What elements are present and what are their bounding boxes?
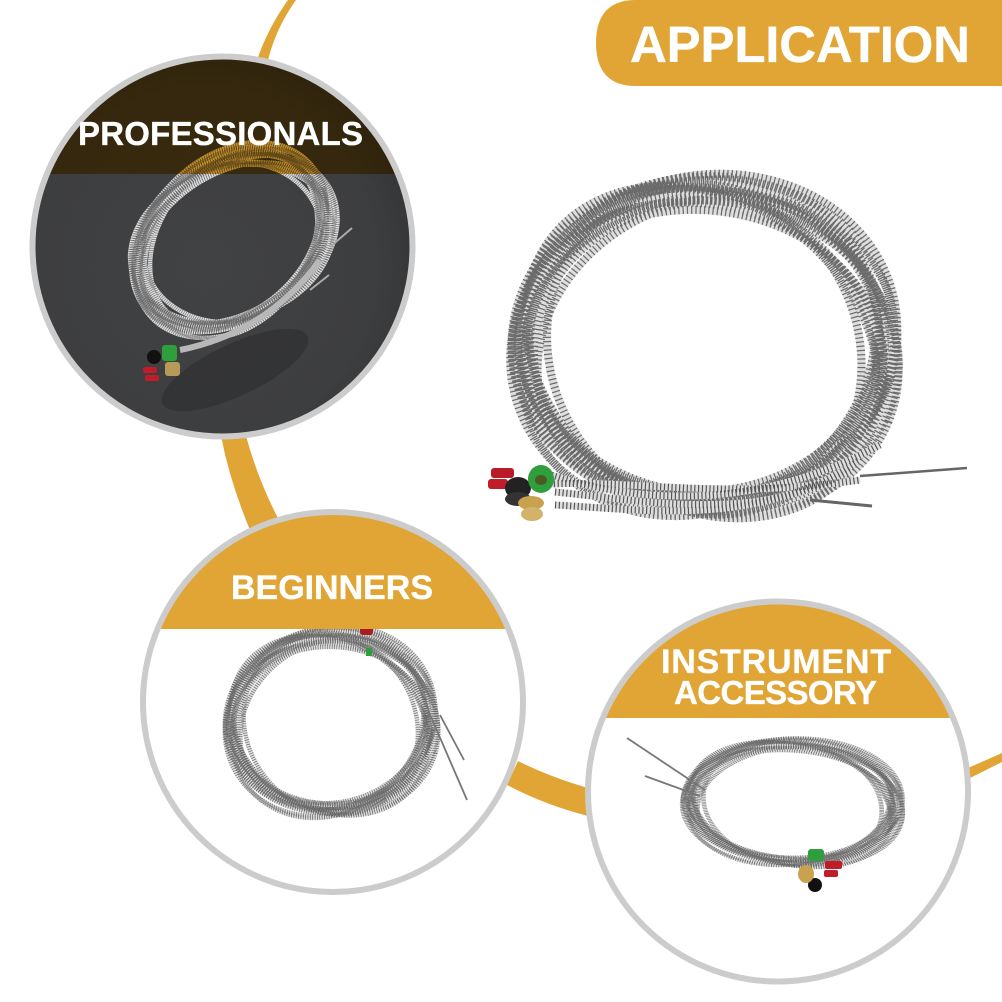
circle panel: professionals bbox=[20, 40, 430, 436]
strings ring bbox=[128, 140, 340, 340]
gold band bbox=[606, 604, 950, 718]
string ends converging on pegs bbox=[548, 445, 880, 511]
connecting gold arc bbox=[221, 0, 1002, 816]
main product photo: bass strings bbox=[454, 111, 967, 587]
label: BEGINNERS bbox=[231, 569, 433, 607]
string tails bbox=[860, 468, 967, 476]
pegs bbox=[147, 350, 161, 364]
header badge: application bbox=[596, 0, 1002, 86]
pegs bbox=[808, 849, 824, 861]
circle panel: instrument accessory bbox=[575, 590, 985, 982]
shadow bbox=[162, 329, 308, 411]
circle panel: beginners bbox=[130, 500, 540, 892]
header title: APPLICATION bbox=[630, 16, 970, 73]
label line 1: INSTRUMENT bbox=[661, 643, 891, 681]
gold band bbox=[50, 60, 395, 174]
pegs bbox=[360, 629, 373, 635]
strings ring bbox=[680, 736, 906, 870]
gold band bbox=[160, 515, 506, 629]
label: PROFESSIONALS bbox=[78, 115, 363, 152]
strings ring bbox=[222, 629, 441, 820]
label line 2: ACCESSORY bbox=[674, 674, 877, 711]
ball-end pegs bbox=[491, 468, 514, 478]
